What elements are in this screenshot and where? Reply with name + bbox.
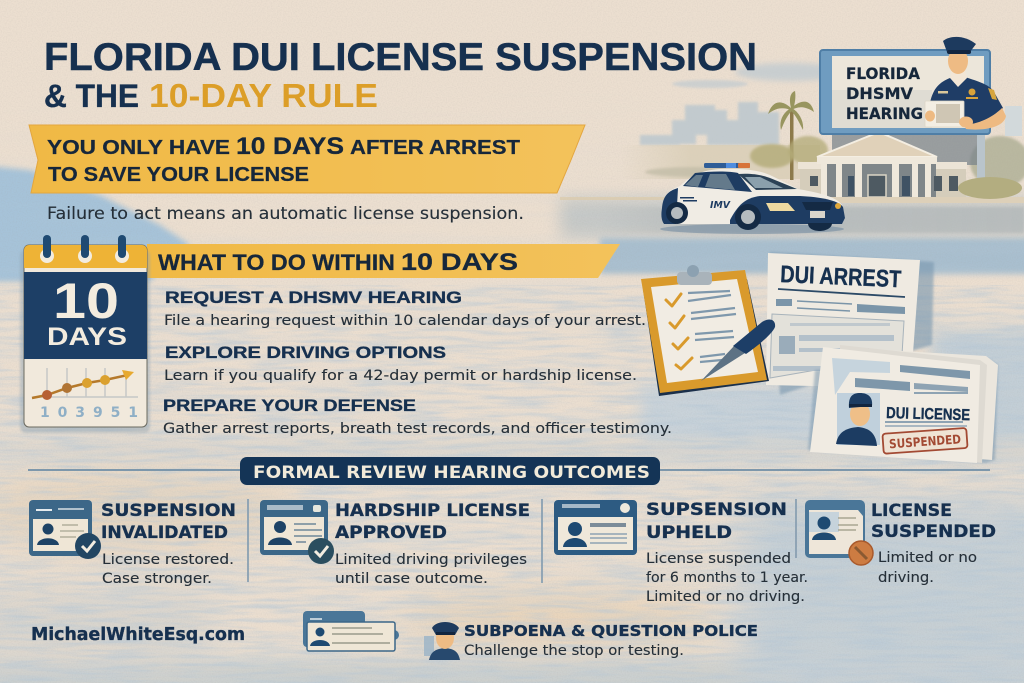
outcome: hardship license approved: HARDSHIP LICENSE xyxy=(335,501,530,521)
outcome: suspension upheld: SUPSENSION xyxy=(646,500,787,520)
DUI license suspended cards: DUI LICENSE xyxy=(886,405,971,424)
outcome: suspension invalidated: License restored. xyxy=(102,552,234,568)
officer with clipboard xyxy=(925,37,1006,130)
police car: IMV xyxy=(710,200,731,211)
background: sandy beach and water wash xyxy=(0,164,1024,683)
divider xyxy=(541,499,543,583)
icon: license xyxy=(554,500,637,555)
title: & THE xyxy=(44,78,139,114)
icon: license with check xyxy=(29,500,101,559)
banner: what to do within 10 days xyxy=(147,244,620,278)
section heading: formal review hearing outcomes xyxy=(28,457,990,485)
website: MichaelWhiteEsq.com xyxy=(31,625,245,645)
title: FLORIDA DUI LICENSE SUSPENSION xyxy=(44,36,757,79)
outcome: license suspended: Limited or no xyxy=(878,550,977,566)
step: request hearing xyxy=(164,288,646,329)
icon: police officer xyxy=(424,622,460,660)
calendar icon: 10 days: DAYS xyxy=(47,323,127,351)
outcome: suspension invalidated: INVALIDATED xyxy=(101,523,228,543)
title: 10-DAY RULE xyxy=(149,77,378,114)
outcome: suspension invalidated: Case stronger. xyxy=(102,571,212,587)
outcome: hardship license approved: APPROVED xyxy=(335,523,447,543)
outcome: suspension upheld: Limited or no driving. xyxy=(646,589,805,605)
subpoena text: SUBPOENA & QUESTION POLICE xyxy=(464,622,758,640)
outcome: suspension upheld: UPHELD xyxy=(646,523,732,543)
step: prepare defense: Gather arrest reports, breath test records, and officer testimony. xyxy=(163,421,672,437)
outcome: license suspended xyxy=(805,500,996,586)
step: request hearing: File a hearing request within 10 calendar days of your arrest. xyxy=(164,313,646,329)
DUI arrest paper: DUI ARREST xyxy=(780,261,902,293)
banner: 10 days warning: TO SAVE YOUR LICENSE xyxy=(48,163,309,186)
outcome: suspension upheld: License suspended xyxy=(646,551,791,567)
outcome: suspension upheld xyxy=(554,500,808,605)
subpoena text: Challenge the stop or testing. xyxy=(464,643,684,659)
outcome: hardship license approved: Limited driving privileges xyxy=(335,552,527,568)
step: prepare defense: PREPARE YOUR DEFENSE xyxy=(163,396,416,415)
banner: 10 days warning: YOU ONLY HAVE xyxy=(47,136,230,159)
step: driving options xyxy=(164,343,637,384)
outcome: suspension invalidated xyxy=(29,500,236,587)
outcome: license suspended: driving. xyxy=(878,570,934,586)
banner: 10 days warning: 10 DAYS xyxy=(236,133,344,160)
scene: skyline, palms and clouds xyxy=(620,63,1024,188)
step: driving options: EXPLORE DRIVING OPTIONS xyxy=(165,343,446,362)
calendar icon: 10 days xyxy=(20,235,150,433)
subpoena text xyxy=(464,622,758,659)
banner: what to do within 10 days: 10 DAYS xyxy=(401,249,518,276)
step: request hearing: REQUEST A DHSMV HEARING xyxy=(165,288,462,307)
DUI license suspended cards: SUSPENDED xyxy=(889,431,961,451)
icon: license cards xyxy=(303,611,399,651)
police car xyxy=(660,163,845,234)
road band xyxy=(560,197,1024,233)
banner: 10 days warning: AFTER ARREST xyxy=(350,136,521,159)
banner: what to do within 10 days: WHAT TO DO WITHIN xyxy=(158,250,395,275)
icon: license with prohibited badge xyxy=(805,500,873,565)
DUI arrest paper xyxy=(766,252,934,395)
outcome: license suspended: SUSPENDED xyxy=(871,522,996,542)
step: driving options: Learn if you qualify for a 42-day permit or hardship license. xyxy=(164,368,637,384)
section heading: formal review hearing outcomes: FORMAL REVIEW HEARING OUTCOMES xyxy=(253,463,650,483)
title xyxy=(44,36,757,114)
warning sentence: Failure to act means an automatic license suspension. xyxy=(47,204,524,223)
billboard: Florida DHSMV Hearing: HEARING xyxy=(846,104,923,123)
outcome: suspension invalidated: SUSPENSION xyxy=(101,501,236,521)
courthouse building xyxy=(795,132,1024,203)
outcome: suspension upheld: for 6 months to 1 year. xyxy=(646,570,808,586)
billboard: Florida DHSMV Hearing xyxy=(820,50,990,134)
billboard: Florida DHSMV Hearing: FLORIDA xyxy=(846,64,921,83)
calendar icon: 10 days: 10 xyxy=(53,273,119,329)
DUI license suspended cards xyxy=(808,345,998,463)
banner: 10 days warning xyxy=(29,125,585,193)
step: prepare defense xyxy=(163,396,672,437)
divider xyxy=(795,499,797,558)
outcome: license suspended: LICENSE xyxy=(871,501,952,521)
clipboard with checklist and pen xyxy=(641,265,775,396)
icon: license with check xyxy=(260,500,334,564)
calendar icon: 10 days: 103951 xyxy=(40,405,138,421)
divider xyxy=(247,499,249,582)
outcome: hardship license approved: until case outcome. xyxy=(335,571,488,587)
billboard: Florida DHSMV Hearing: DHSMV xyxy=(846,84,914,103)
outcome: hardship license approved xyxy=(260,500,530,587)
